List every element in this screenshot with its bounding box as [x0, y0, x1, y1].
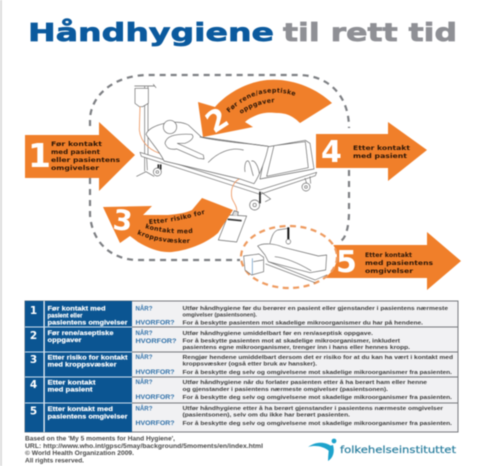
row 1: Før kontakt med [48, 306, 106, 312]
row 5: HVORFOR? [136, 420, 175, 427]
arrow 5: omgivelser [365, 268, 414, 275]
catheter tube [231, 179, 239, 211]
row 1: For å beskytte pasienten mot skadelige mikroorganismer du har på hendene. [182, 320, 423, 326]
row 5: For å beskytte deg selv og omgivelsene mot skadelige mikroorganismer fra pasienten. [182, 420, 452, 427]
row 2: Før rene/aseptiske [48, 330, 114, 337]
arrow 3: 3 [111, 203, 134, 238]
arrow 1: omgivelser [51, 165, 100, 172]
row 4: og gjenstander i pasientens nærmeste omgivelser (pasientsonen). [182, 387, 388, 393]
row 3: 3 [30, 354, 37, 366]
arrow 5: 5 [336, 245, 357, 280]
arrow 2: 2 [199, 100, 235, 140]
row 3: Etter risiko for kontakt [48, 354, 129, 362]
row 2: pasientens egne mikroorganismer, trenger inn i hans eller hennes kropp. [182, 345, 410, 351]
row 2: 2 [30, 330, 37, 342]
row 4 [30, 379, 452, 401]
arrow 2 [197, 79, 332, 140]
patient zone circle [241, 226, 337, 288]
arrow 2: oppgaver [239, 98, 275, 114]
row 3 [30, 354, 454, 376]
row 1: 1 [30, 305, 37, 317]
arrow 4 [316, 122, 427, 181]
row 4: For å beskytte deg selv og omgivelsene mot skadelige mikroorganismer fra pasienten. [182, 394, 452, 401]
row 5: (pasientsonen), selv om du ikke har berørt pasienten. [182, 412, 350, 418]
bed frame [140, 152, 317, 210]
row 5: pasientens omgivelser [48, 414, 128, 420]
arrow 4: 4 [321, 135, 342, 170]
row 1: Utfør håndhygiene før du berører en pasient eller gjenstander i pasientens nærmeste [182, 305, 449, 312]
logo: folkehelseinstituttet [308, 439, 456, 461]
row 1: HVORFOR? [136, 320, 175, 326]
row 4: HVORFOR? [136, 394, 175, 401]
row 3: med kroppsvæsker [48, 362, 117, 368]
arrow 5: med pasientens [365, 260, 433, 267]
footer credits: © World Health Organization 2009. [25, 450, 134, 457]
orange drip tube [139, 107, 182, 155]
arrow 3: kroppsvæsker [137, 229, 190, 244]
row 3: HVORFOR? [136, 369, 175, 376]
row 4: Etter kontakt [48, 380, 97, 386]
arrow 3: kontakt med [145, 223, 193, 234]
arrow 1: eller pasientens [51, 157, 120, 164]
row 2: Utfør håndhygiene umiddelbart før en ren/aseptisk oppgave. [182, 330, 373, 337]
row 1: omgivelser (pasientsonen). [182, 312, 257, 318]
arrow 1: med pasient [51, 149, 100, 156]
arrow 1: 1 [28, 136, 51, 175]
arrow 2: Før rene/aseptiske [226, 87, 296, 113]
title: Håndhygiene [28, 18, 274, 47]
row 4: NÅR? [136, 379, 153, 386]
empty bed and bedside table [244, 227, 327, 283]
row 5: Etter kontakt med [48, 406, 113, 413]
bed illustration [135, 84, 317, 211]
row 2: oppgaver [48, 337, 82, 344]
row 1: pasient eller [48, 312, 83, 320]
footboard [260, 140, 314, 179]
arrow 1 [25, 122, 135, 191]
row 2: NÅR? [136, 330, 153, 337]
row 4: Utfør håndhygiene når du forlater pasienten etter å ha berørt ham eller henne [182, 379, 428, 386]
footer credits: All rights reserved. [25, 458, 84, 464]
arrow 5 [241, 226, 461, 290]
row 1: pasientens omgivelser [48, 320, 128, 326]
row 3: NÅR? [136, 354, 153, 361]
title: til rett tid [283, 18, 457, 47]
row 1 [30, 305, 449, 326]
row 2: HVORFOR? [136, 338, 177, 345]
row 2 [30, 330, 410, 351]
arrow 4: med pasient [353, 153, 407, 160]
footer credits [25, 436, 263, 464]
row 3: kroppsvæsker (også etter bruk av hansker). [182, 360, 317, 368]
row 3: Rengjør hendene umiddelbart dersom det er risiko for at du kan ha vært i kontakt med [182, 355, 454, 361]
logo: folkehelseinstituttet: folkehelseinstituttet [340, 445, 456, 456]
row 5: 5 [30, 406, 37, 418]
arrow 3 [102, 197, 234, 253]
footer credits: Based on the 'My 5 moments for Hand Hygiene', [25, 436, 175, 442]
row 4: med pasient [48, 386, 94, 394]
logo icon [308, 439, 336, 461]
arrow 5: Etter kontakt [365, 252, 412, 259]
table number and title column [25, 301, 458, 432]
row 5: Utfør håndhygiene etter å ha berørt gjenstander i pasientens nærmeste omgivelser [182, 405, 444, 412]
row 1: NÅR? [136, 306, 153, 312]
arrow 1: Før kontakt [51, 141, 102, 148]
arrow 4: Etter kontakt [353, 145, 410, 152]
arrow 3: Etter risiko for [148, 210, 205, 225]
sheet and patient [146, 120, 268, 184]
urine bag [218, 211, 247, 242]
title [28, 18, 457, 47]
IV pole and bag [135, 84, 156, 176]
row 2: For å beskytte pasienten mot at skadelige mikroorganismer, inkludert [182, 338, 400, 344]
row 3: For å beskytte deg selv og omgivelsene mot skadelige mikroorganismer fra pasienten. [182, 369, 452, 376]
row 5: NÅR? [136, 406, 153, 412]
row 5 [30, 405, 452, 427]
footer credits: URL: http://www.who.int/gpsc/5may/background/5moments/en/index.html [25, 444, 263, 450]
row 4: 4 [30, 379, 37, 391]
dashed patient zone outline [90, 75, 349, 260]
table panel [25, 301, 458, 432]
